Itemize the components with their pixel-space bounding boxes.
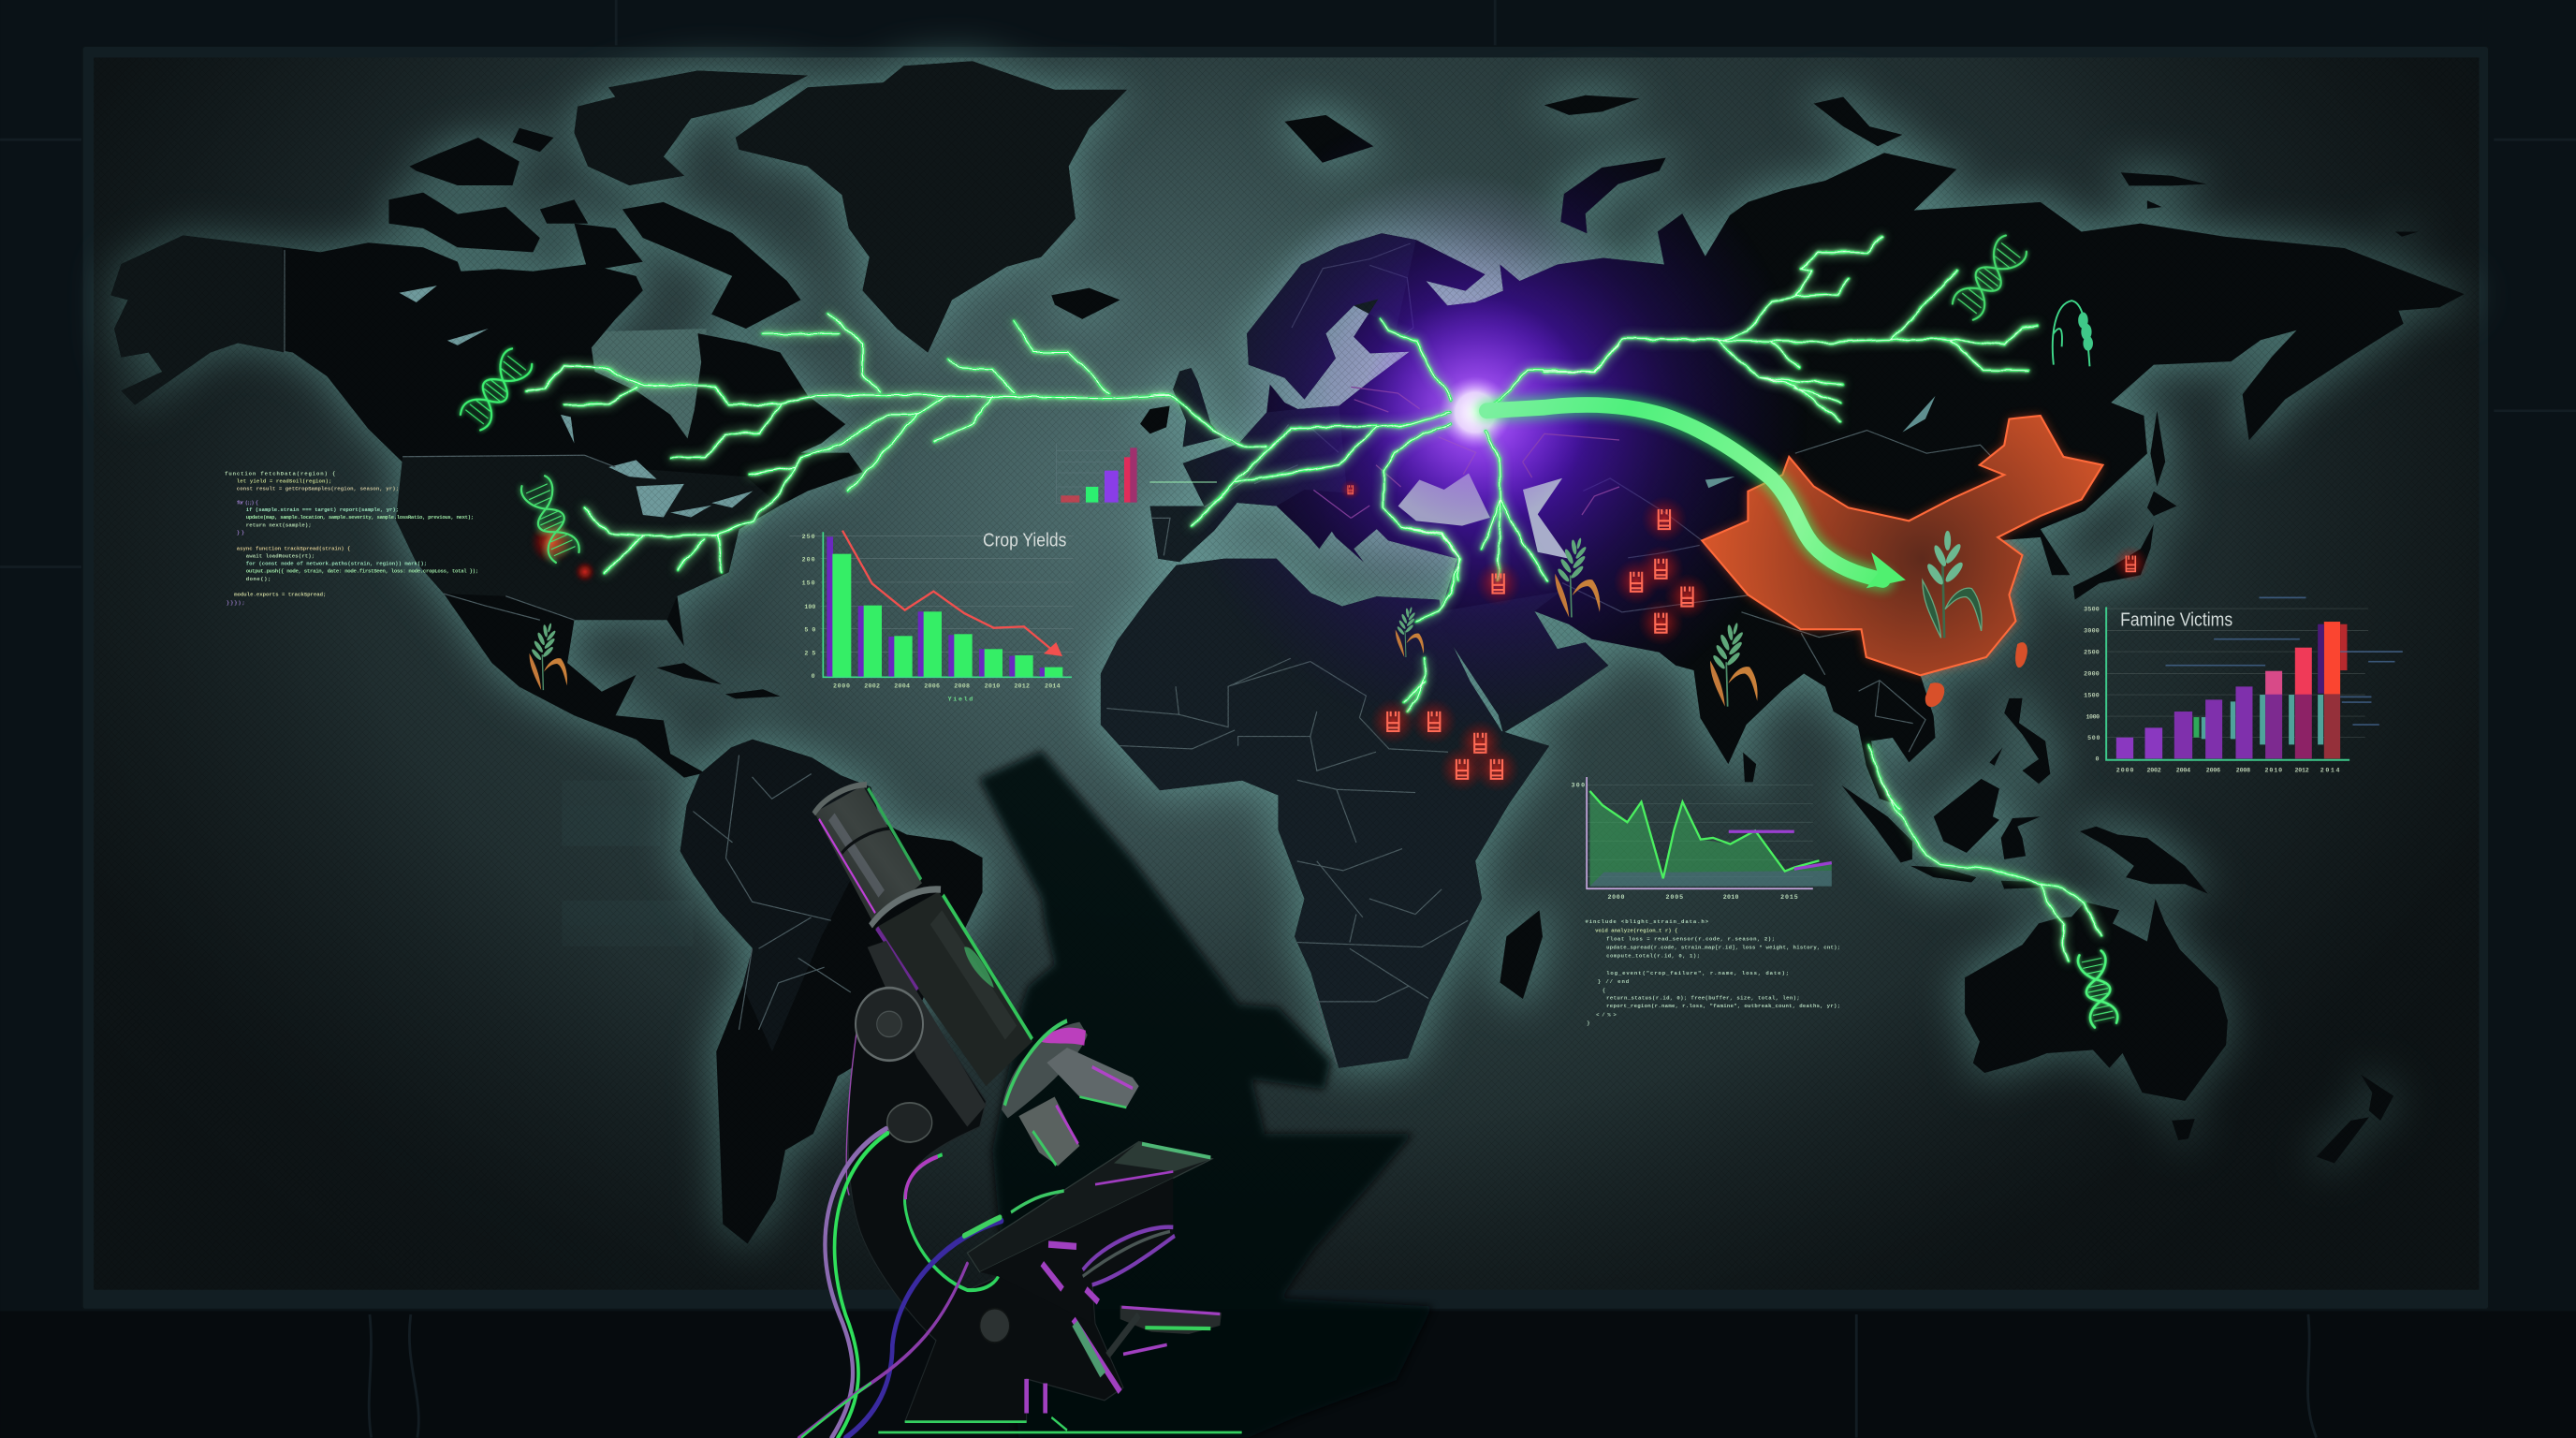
axis labels: 3500 bbox=[2084, 606, 2100, 613]
map board bbox=[94, 57, 2479, 1290]
Baikal and Balkhash lakes bbox=[1705, 396, 1935, 488]
violet and red bars bbox=[2116, 738, 2133, 758]
axis labels: 150 bbox=[802, 580, 815, 587]
famine markers bbox=[1340, 479, 2149, 792]
main tube bbox=[875, 891, 1032, 1086]
coarse focus knob bbox=[856, 988, 923, 1061]
teal back bars bbox=[2193, 695, 2323, 744]
axis labels: 0 bbox=[812, 672, 815, 680]
axis labels: 2006 bbox=[2206, 767, 2220, 774]
faint glitch bands bbox=[562, 781, 694, 946]
code block: left: output.push({ node, strain, date: node.firstSeen, loss: node.cropLoss, total }); bbox=[246, 568, 478, 575]
code block: right: void analyze(region_t r) { bbox=[1595, 927, 1677, 933]
condenser bbox=[1083, 1227, 1175, 1284]
icon: DNA helix Australia bbox=[2077, 950, 2119, 1028]
code block: right: compute_total(r.id, 0, 1); bbox=[1606, 953, 1700, 960]
axis labels: 1000 bbox=[2086, 712, 2100, 720]
bar chart: Crop Yields bbox=[789, 530, 1074, 702]
microscope bbox=[798, 785, 1242, 1438]
axis labels: 250 bbox=[802, 533, 815, 540]
ocean surface bbox=[94, 57, 2479, 1290]
icon: DNA helix Siberia bbox=[1950, 233, 2028, 322]
board vignette bbox=[94, 57, 2479, 1290]
area chart: 2015 bbox=[1780, 893, 1798, 901]
area chart: 2005 bbox=[1665, 893, 1683, 901]
country borders bbox=[285, 243, 2004, 1064]
glitch streaks bbox=[2165, 597, 2403, 725]
code block: left: for (const node of network.paths(strain, region)) mark(); bbox=[246, 560, 427, 566]
water bodies in land bbox=[399, 286, 753, 518]
gridlines and axes bbox=[789, 536, 1074, 653]
continents bbox=[110, 61, 2465, 1244]
Hudson Bay water bbox=[588, 329, 707, 444]
axis labels: 2008 bbox=[2236, 767, 2250, 774]
base screw bbox=[980, 1309, 1010, 1343]
green bars bbox=[832, 554, 1062, 677]
axis labels: 500 bbox=[2087, 734, 2100, 741]
icon: wheat Mexico bbox=[530, 623, 567, 690]
South America shading bbox=[681, 740, 881, 1051]
code block: right: } // end bbox=[1598, 978, 1629, 985]
purple borders near the flare bbox=[1313, 387, 1619, 518]
Western Europe and Middle East shading bbox=[1150, 233, 1608, 733]
objective short bbox=[1018, 1097, 1079, 1167]
axis labels: 2014 bbox=[1045, 682, 1061, 690]
cables bbox=[798, 1129, 1002, 1438]
axis labels: 2012 bbox=[1014, 682, 1030, 690]
axis labels bbox=[2084, 606, 2339, 774]
Atlantic lighting bbox=[94, 57, 2479, 1290]
code block: left: for (;;) { bbox=[237, 500, 258, 506]
code block: right: return_status(r.id, 0); free(buffer, size, total, len); bbox=[1606, 994, 1800, 1001]
gridlines and axes bbox=[2106, 609, 2403, 738]
icon: wheat Egypt bbox=[1396, 607, 1424, 657]
axis labels: 2000 bbox=[833, 682, 850, 690]
bar chart: Famine Victims bbox=[2084, 597, 2403, 774]
axis labels: 3000 bbox=[2084, 627, 2100, 635]
objective long bbox=[1046, 1048, 1139, 1108]
code block: right bbox=[1585, 918, 1840, 1027]
axis labels: 50 bbox=[804, 625, 815, 633]
stage underside bbox=[980, 1178, 1173, 1324]
code block: left: if (sample.strain === target) report(sample, yr); bbox=[246, 506, 399, 513]
area chart bbox=[1571, 777, 1832, 901]
microscope shadow bbox=[979, 751, 1432, 1438]
code block: right: #include <blight_strain_data.h> bbox=[1585, 918, 1709, 925]
spread arrow into China bbox=[1486, 404, 1906, 588]
purple light falling on land bbox=[1204, 165, 1778, 702]
area chart: 2000 bbox=[1607, 893, 1624, 901]
Hainan and Taiwan bbox=[1925, 642, 2027, 707]
axis labels: 1500 bbox=[2084, 692, 2100, 699]
stage bbox=[967, 1141, 1212, 1272]
bar chart: small inset bbox=[1056, 443, 1217, 503]
axis labels: 2010 bbox=[985, 682, 1000, 690]
rack bbox=[868, 941, 986, 1127]
axis labels: 200 bbox=[802, 555, 815, 563]
canvas texture bbox=[94, 57, 2479, 1290]
code block: left bbox=[225, 470, 478, 607]
sub-stage parts bbox=[1042, 1244, 1120, 1392]
axis labels: Yield bbox=[948, 695, 973, 702]
axis labels: 2012 bbox=[2294, 767, 2309, 774]
lavender water near flare bbox=[1183, 148, 1741, 624]
code block: left: function fetchData(region) { bbox=[225, 470, 335, 477]
fine focus knob bbox=[887, 1103, 932, 1142]
chart title: Famine Victims bbox=[2120, 609, 2232, 630]
code block: right: update_spread(r.code, strain_map[r.id], loss * weight, history, cnt); bbox=[1606, 945, 1840, 951]
code block: left: update(map, sample.location, sample.severity, sample.lossRatio, previous, next); bbox=[246, 514, 474, 521]
code block: left: }}}); bbox=[227, 600, 245, 607]
lightning network bbox=[526, 236, 2101, 961]
axis labels: 2002 bbox=[2146, 767, 2161, 774]
axis labels: 2000 bbox=[2084, 670, 2100, 678]
code block: right: float loss = read_sensor(r.code, r.season, 2); bbox=[1606, 935, 1775, 942]
code block: left: }} bbox=[237, 530, 244, 536]
icon: wheat India bbox=[1710, 623, 1758, 707]
axis labels: 2010 bbox=[2264, 767, 2282, 774]
axis labels bbox=[802, 533, 1061, 702]
flare at pathogen source bbox=[1360, 296, 1590, 526]
chart title: Crop Yields bbox=[983, 530, 1066, 550]
axis labels: 100 bbox=[804, 603, 815, 610]
axis labels: 0 bbox=[2095, 756, 2099, 763]
code block: right: } bbox=[1587, 1020, 1590, 1027]
Arctic and Greenland shading bbox=[110, 61, 1127, 620]
area chart: 2010 bbox=[1723, 893, 1738, 901]
Caspian Sea bbox=[1523, 478, 1569, 559]
arm inner highlight bbox=[905, 1154, 999, 1290]
code block: left: const result = getCropSamples(region, season, yr); bbox=[237, 486, 399, 492]
icon: DNA helix North America bbox=[458, 346, 534, 432]
coastal glow bbox=[110, 61, 2465, 1244]
area chart: 300 bbox=[1571, 782, 1585, 789]
code block: left: done(); bbox=[246, 576, 271, 582]
stand and arm bbox=[848, 1007, 1123, 1422]
nosepiece bbox=[1002, 1022, 1088, 1118]
axis labels: 2004 bbox=[2176, 767, 2190, 774]
code block: left: return next(sample); bbox=[246, 521, 312, 528]
Black Sea bbox=[1398, 473, 1490, 526]
inland seas bbox=[1398, 396, 1935, 559]
violet bar shadows bbox=[827, 536, 1046, 677]
mirror bbox=[1120, 1305, 1222, 1334]
base plate bbox=[878, 1417, 1242, 1432]
Africa shading bbox=[1101, 559, 1549, 1068]
axis labels: 2008 bbox=[954, 682, 970, 690]
axis labels: 2006 bbox=[924, 682, 940, 690]
code block: left: module.exports = trackSpread; bbox=[234, 592, 326, 598]
code block: right: report_region(r.name, r.loss, "famine", outbreak_count, deaths, yr); bbox=[1606, 1003, 1840, 1009]
eyepiece tube bbox=[814, 785, 922, 924]
icon: DNA helix USA bbox=[520, 475, 594, 581]
icon: wheat Siberia bbox=[2053, 301, 2093, 366]
code block: left: let yield = readSoil(region); bbox=[237, 477, 331, 484]
decline trend arrow bbox=[842, 531, 1062, 656]
code block: left: await loadRoutes(rt); bbox=[246, 552, 315, 559]
axis labels: 2004 bbox=[894, 682, 910, 690]
axis labels: 2002 bbox=[864, 682, 880, 690]
axis labels: 2000 bbox=[2116, 767, 2133, 774]
code block: left: async function trackSpread(strain) { bbox=[237, 545, 350, 551]
axis labels: 2014 bbox=[2320, 767, 2339, 774]
code block: right: log_event("crop_failure", r.name, loss, date); bbox=[1606, 970, 1789, 976]
China highlighted bbox=[1702, 416, 2102, 707]
axis labels: 25 bbox=[804, 649, 815, 656]
icon: wheat Iran bbox=[1555, 537, 1600, 617]
icon: wheat China bbox=[1923, 531, 1982, 638]
code block: right: </%> bbox=[1596, 1011, 1617, 1018]
code block: right: { bbox=[1603, 987, 1605, 993]
axis labels: 2500 bbox=[2084, 649, 2100, 656]
